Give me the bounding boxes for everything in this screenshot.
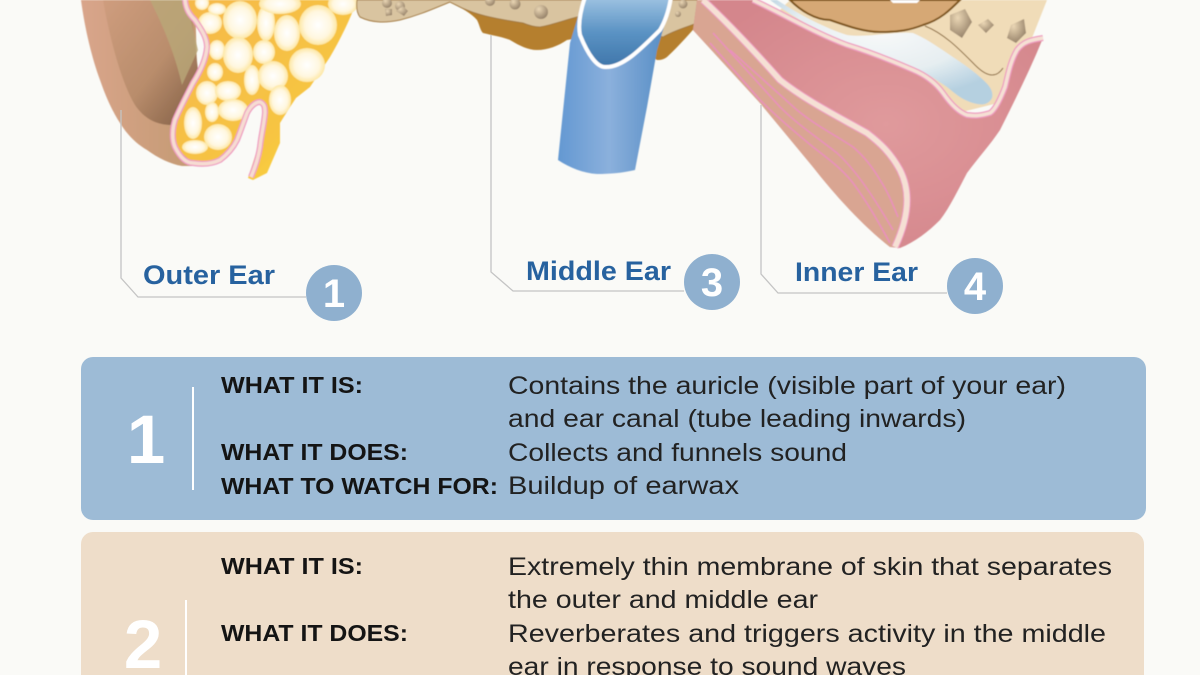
row: what it is: and ear canal (tube leading inwards) bbox=[508, 405, 966, 433]
row: what it is: WHAT IT IS: bbox=[221, 372, 363, 398]
panel: eardrum details bbox=[81, 532, 1144, 675]
inner ear bbox=[693, 0, 1047, 248]
row: what it does: WHAT IT DOES: bbox=[221, 439, 408, 465]
outer ear bbox=[81, 0, 358, 180]
badge 1: 1 bbox=[323, 272, 345, 316]
leader line: outer ear bbox=[121, 110, 306, 297]
badge 3: 3 bbox=[701, 261, 723, 305]
row: what it is: Contains the auricle (visible part of your ear) bbox=[508, 372, 1066, 400]
row: what to watch for: WHAT TO WATCH FOR: bbox=[221, 473, 498, 499]
row: what to watch for: Buildup of earwax bbox=[508, 472, 740, 500]
badge 4 bbox=[947, 258, 1003, 314]
row: what to watch for bbox=[221, 472, 740, 500]
badge 4: 4 bbox=[964, 265, 987, 309]
badge 1 bbox=[306, 265, 362, 321]
row: what it is bbox=[221, 553, 1112, 614]
leader line: inner ear bbox=[761, 105, 947, 293]
label: outer ear: Outer Ear bbox=[143, 260, 276, 290]
temporal bone bbox=[357, 0, 703, 60]
panel: outer ear details bbox=[81, 357, 1146, 520]
label: middle ear: Middle Ear bbox=[526, 256, 672, 286]
eustachian tube bbox=[558, 0, 672, 174]
row: what it is: the outer and middle ear bbox=[508, 586, 818, 614]
number divider bbox=[192, 387, 194, 490]
row: what it does: Reverberates and triggers activity in the middle bbox=[508, 620, 1106, 648]
row: what it does bbox=[221, 439, 847, 467]
row: what it does bbox=[221, 620, 1106, 675]
row: what it does: Collects and funnels sound bbox=[508, 439, 847, 467]
leader line: middle ear bbox=[491, 35, 684, 291]
label: inner ear: Inner Ear bbox=[795, 257, 919, 287]
row: what it is bbox=[221, 372, 1066, 433]
row: what it is: WHAT IT IS: bbox=[221, 553, 363, 579]
badge 3 bbox=[684, 254, 740, 310]
row: what it is: Extremely thin membrane of skin that separates bbox=[508, 553, 1112, 581]
row: what it does: WHAT IT DOES: bbox=[221, 620, 408, 646]
panel number 1: 1 bbox=[127, 401, 165, 478]
number divider bbox=[185, 600, 187, 675]
illustration: ear anatomy bbox=[81, 0, 1047, 248]
